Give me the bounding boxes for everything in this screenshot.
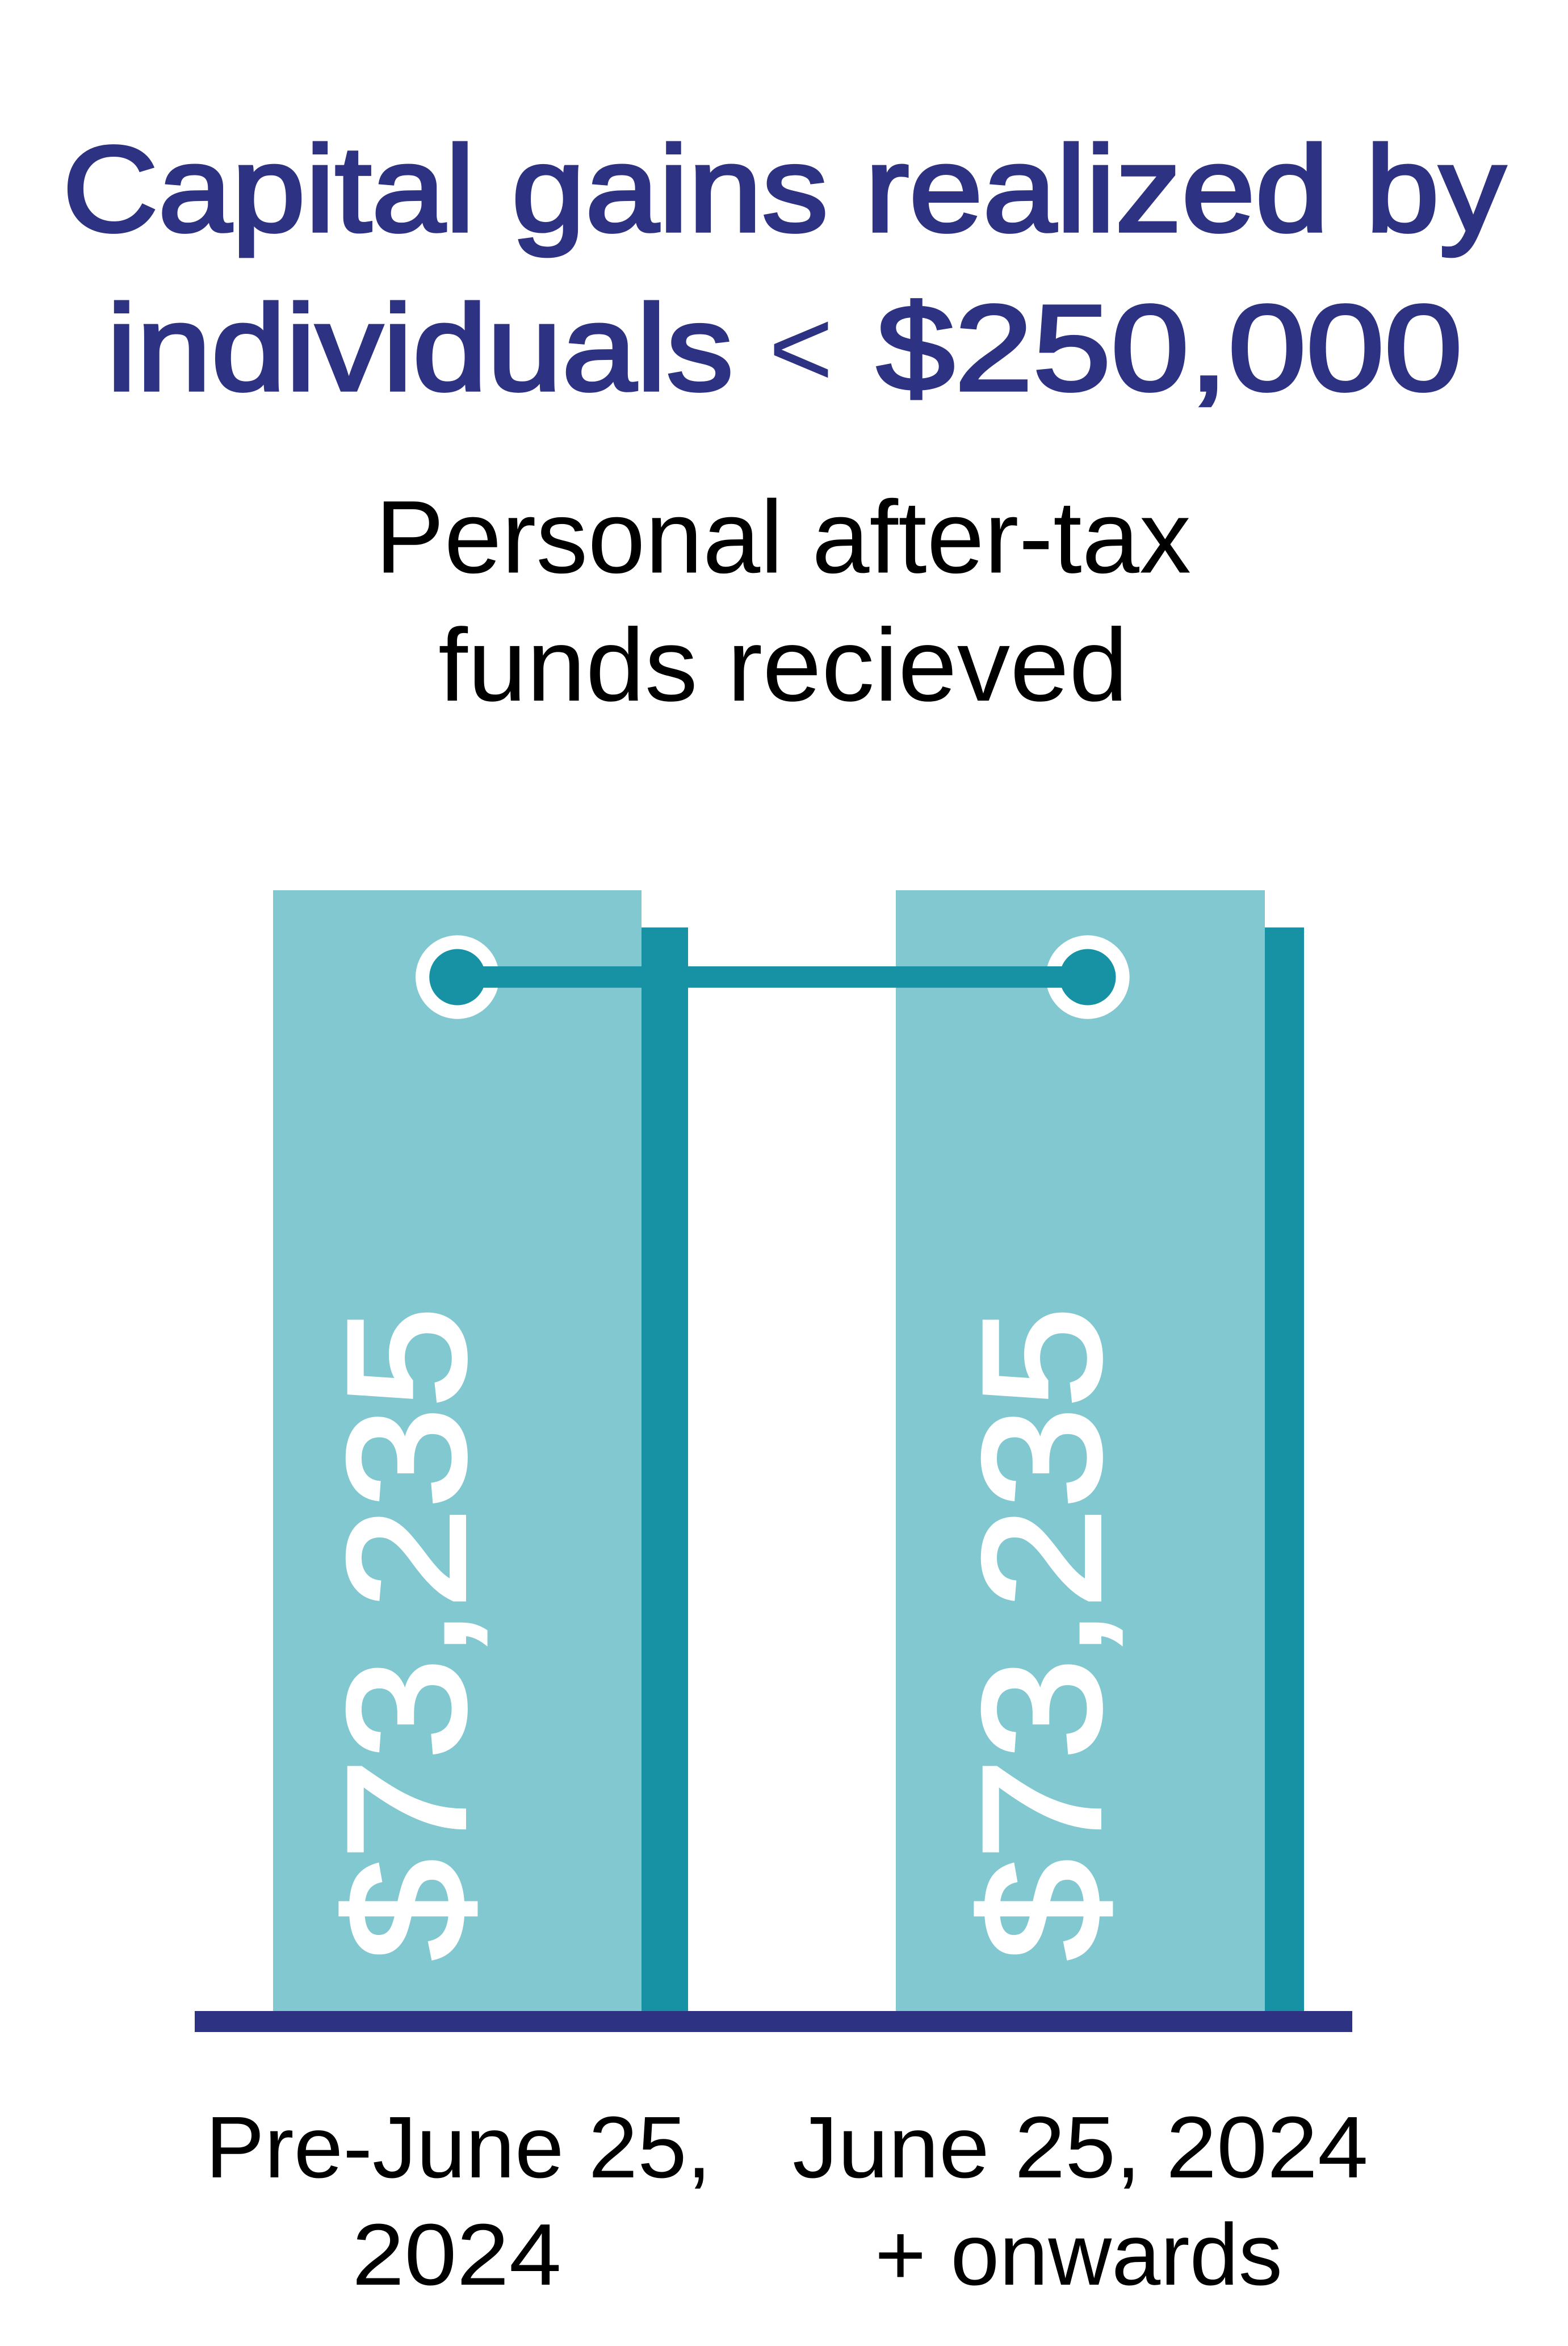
title bbox=[62, 120, 1506, 416]
value label: left bar: $73,235 bbox=[313, 1307, 500, 1960]
connector line with circular end markers bbox=[416, 935, 1130, 1019]
axis label: June 25, 2024 + onwards bbox=[793, 2098, 1368, 2303]
axis label: pre-June 25, 2024: 2024 bbox=[352, 2206, 561, 2303]
title: Capital gains realized by bbox=[62, 120, 1506, 257]
subtitle: funds recieved bbox=[438, 607, 1128, 723]
title: $250,000 bbox=[877, 279, 1462, 416]
axis label: pre-June 25, 2024 bbox=[206, 2098, 711, 2303]
axis label: June 25, 2024 + onwards: + onwards bbox=[875, 2206, 1282, 2303]
axis label: June 25, 2024 + onwards: June 25, 2024 bbox=[793, 2098, 1368, 2196]
bar: June 25, 2024 onwards bbox=[896, 890, 1304, 2011]
bar: pre-June 25, 2024 bbox=[273, 890, 688, 2011]
axis label: pre-June 25, 2024: Pre-June 25, bbox=[206, 2098, 711, 2196]
value label: right bar: $73,235 bbox=[949, 1307, 1135, 1960]
baseline axis bbox=[195, 2011, 1352, 2032]
title: < bbox=[769, 286, 833, 410]
subtitle: Personal after-tax bbox=[375, 479, 1191, 595]
subtitle bbox=[375, 479, 1191, 723]
title: individuals bbox=[107, 279, 733, 416]
